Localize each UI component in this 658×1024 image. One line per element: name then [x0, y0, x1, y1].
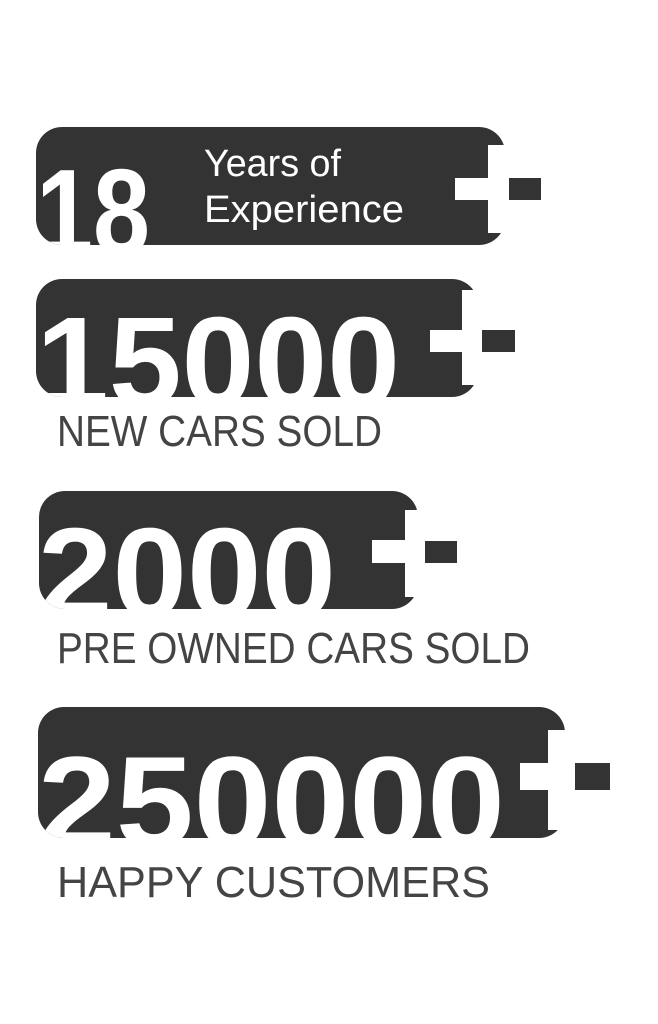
text: years of experience: Years of — [204, 143, 341, 185]
text: years of experience — [204, 143, 404, 231]
big number 18: 18 — [36, 144, 150, 280]
label: pre owned cars sold: PRE OWNED CARS SOLD — [57, 624, 530, 673]
label: new cars sold: NEW CARS SOLD — [57, 407, 382, 456]
label: happy customers: HAPPY CUSTOMERS — [57, 858, 490, 907]
big number 2000: 2000 — [38, 502, 336, 645]
panel: happy customers — [38, 707, 610, 907]
panel: new cars sold — [36, 279, 515, 456]
panel: pre owned cars sold — [38, 491, 530, 673]
icon: plus — [430, 290, 515, 385]
big number 15000: 15000 — [36, 291, 400, 434]
text: years of experience: Experience — [204, 189, 404, 231]
panel: years of experience — [36, 127, 541, 245]
big number 250000: 250000 — [38, 729, 505, 875]
icon: plus — [372, 510, 457, 597]
icon: plus — [520, 730, 610, 830]
icon: plus — [455, 145, 541, 233]
